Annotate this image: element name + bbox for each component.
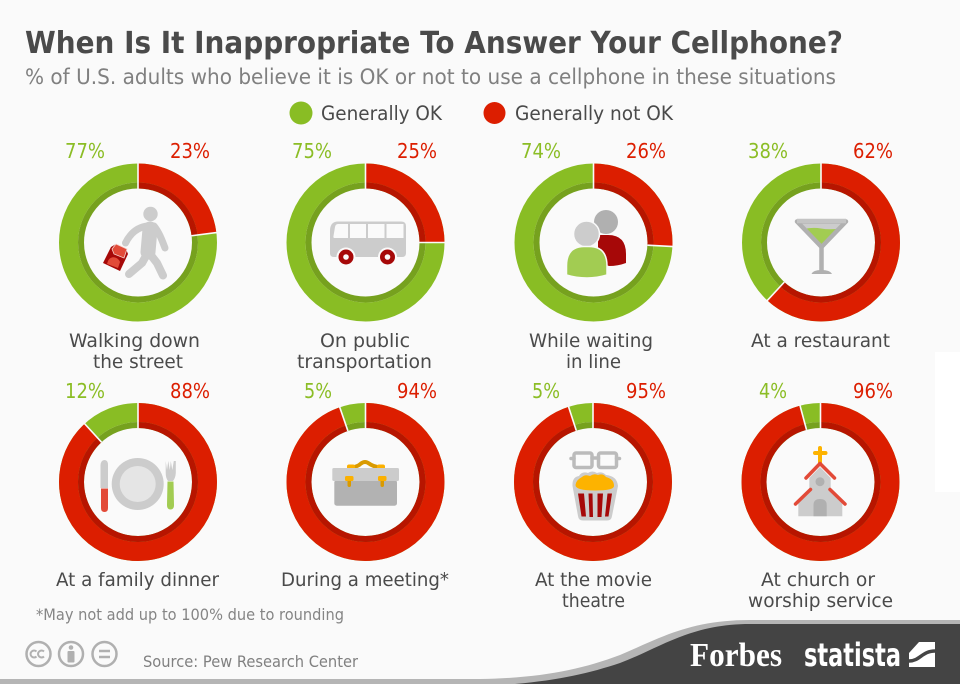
donut chart: family dinner <box>68 402 208 552</box>
values: 77% and 23%: 23% <box>170 139 210 163</box>
subtitle: % of U.S. adults who believe it is OK or not to use a cellphone in these situations <box>25 65 836 89</box>
label: at the movie theatre <box>535 569 652 612</box>
values: 5% and 95%: 95% <box>626 379 666 403</box>
icon: martini glass <box>797 221 846 274</box>
label: walking down the street: the street <box>93 351 183 373</box>
legend: generally not OK: Generally not OK <box>515 102 674 125</box>
label: at church or worship service: worship service <box>748 590 893 612</box>
icon: briefcase <box>332 462 399 506</box>
values: 4% and 96%: 4% <box>759 379 787 403</box>
panel: walking down the street <box>65 139 217 373</box>
icon: two people <box>566 210 626 278</box>
values: 75% and 25%: 25% <box>397 139 437 163</box>
values: 74% and 26%: 26% <box>626 139 666 163</box>
label: walking down the street: Walking down <box>69 330 200 352</box>
label: at a restaurant: At a restaurant <box>751 330 890 352</box>
panel: on public transportation <box>292 139 446 373</box>
icon: walking person with bag <box>103 207 165 276</box>
values: 4% and 96%: 96% <box>853 379 893 403</box>
logo: statista: statista <box>804 636 901 674</box>
panel: while waiting in line <box>521 139 673 373</box>
label: walking down the street <box>69 330 200 373</box>
values: 5% and 94%: 5% <box>304 379 332 403</box>
panel: at a family dinner <box>56 379 219 591</box>
panel: at a restaurant <box>748 139 893 352</box>
panel: at church or worship service <box>748 379 893 612</box>
values: 75% and 25% <box>292 139 437 163</box>
donut chart: restaurant <box>752 162 890 312</box>
label: at the movie theatre: theatre <box>562 590 625 612</box>
label: at the movie theatre: At the movie <box>535 569 652 591</box>
donut chart: meeting <box>296 402 435 552</box>
icon: 3D glasses and popcorn <box>571 453 620 520</box>
values: 77% and 23%: 77% <box>65 139 105 163</box>
footer band <box>0 620 960 684</box>
values: 74% and 26% <box>521 139 666 163</box>
values: 5% and 95% <box>532 379 666 403</box>
legend <box>290 102 674 125</box>
values: 74% and 26%: 74% <box>521 139 561 163</box>
source: Source: Pew Research Center <box>143 652 358 671</box>
label: while waiting in line <box>529 330 653 373</box>
panel: during a meeting <box>281 379 449 591</box>
values: 4% and 96% <box>759 379 893 403</box>
values: 38% and 62%: 38% <box>748 139 788 163</box>
label: while waiting in line: in line <box>566 351 621 373</box>
values: 77% and 23% <box>65 139 210 163</box>
values: 38% and 62% <box>748 139 893 163</box>
donut chart: waiting in line <box>524 162 673 312</box>
logo: Forbes: Forbes <box>690 637 782 674</box>
values: 5% and 95%: 5% <box>532 379 560 403</box>
label: on public transportation <box>297 330 432 373</box>
donut chart: movie theatre <box>524 402 662 552</box>
values: 12% and 88% <box>65 379 210 403</box>
values: 12% and 88%: 88% <box>170 379 210 403</box>
legend: generally OK: Generally OK <box>321 102 443 125</box>
donut chart: church <box>751 402 890 552</box>
label: at a family dinner: At a family dinner <box>56 569 219 591</box>
label: on public transportation: On public <box>320 330 410 352</box>
label: at church or worship service <box>748 569 893 612</box>
donut chart: walking <box>68 162 217 312</box>
label: during a meeting: During a meeting* <box>281 569 449 591</box>
values: 75% and 25%: 75% <box>292 139 332 163</box>
icon: bus <box>330 222 406 266</box>
values: 5% and 94% <box>304 379 437 403</box>
footnote: *May not add up to 100% due to rounding <box>36 605 344 624</box>
label: on public transportation: transportation <box>297 351 432 373</box>
icon: church <box>796 448 845 516</box>
donut chart: transportation <box>296 162 446 312</box>
icon: creative commons licence <box>26 642 116 666</box>
label: at church or worship service: At church or <box>761 569 875 591</box>
panel: at the movie theatre <box>524 379 666 612</box>
values: 38% and 62%: 62% <box>853 139 893 163</box>
icon: plate, knife and fork <box>100 458 176 512</box>
values: 12% and 88%: 12% <box>65 379 105 403</box>
title: When Is It Inappropriate To Answer Your Cellphone? <box>25 26 843 61</box>
label: while waiting in line: While waiting <box>529 330 653 352</box>
values: 5% and 94%: 94% <box>397 379 437 403</box>
